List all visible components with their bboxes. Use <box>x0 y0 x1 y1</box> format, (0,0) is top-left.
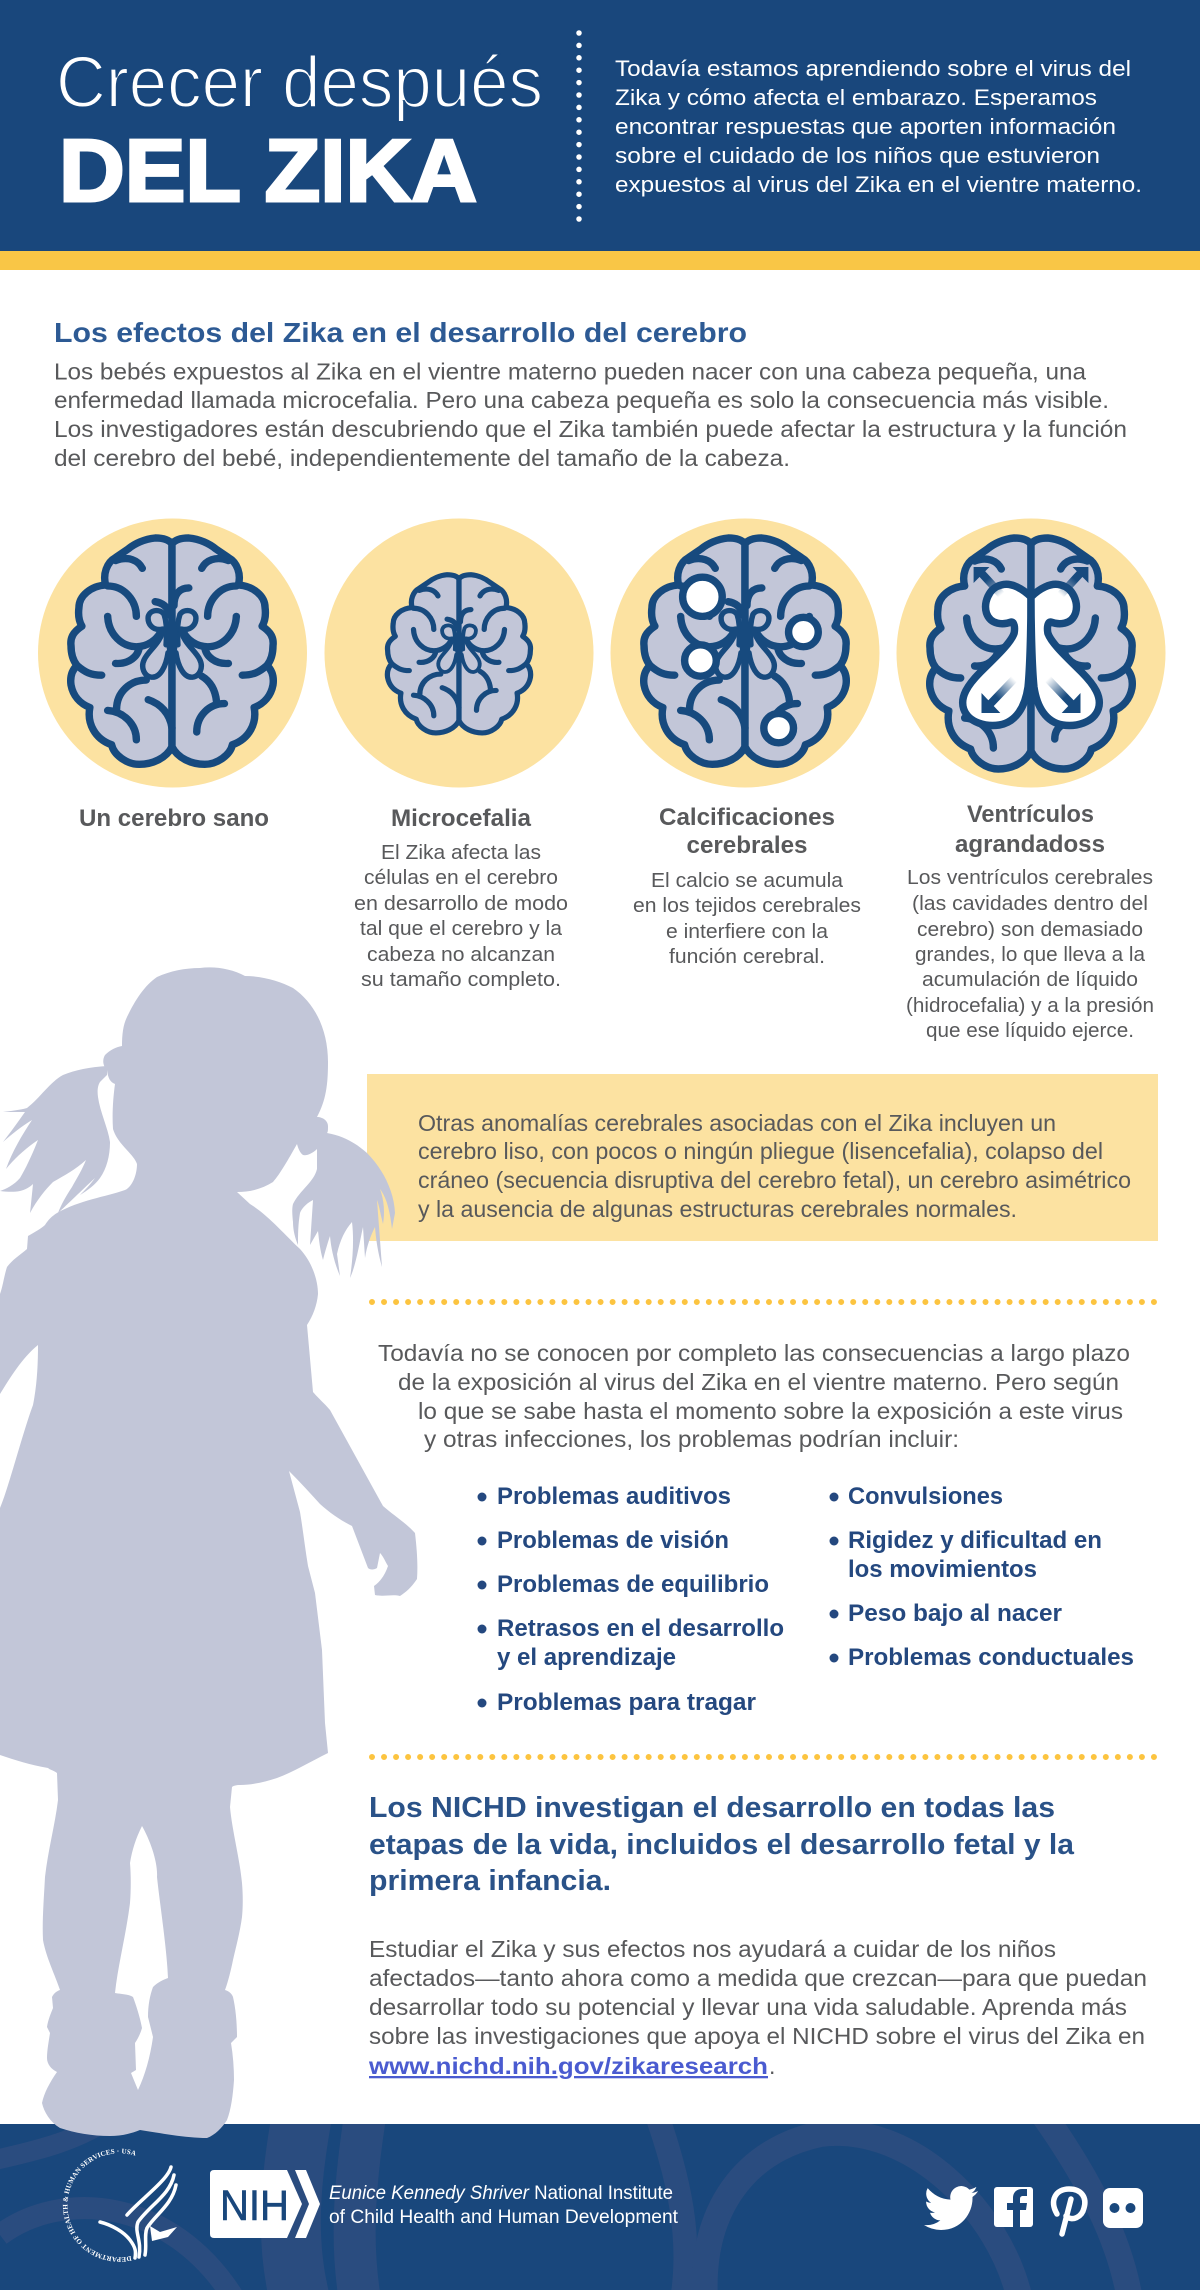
header banner <box>0 0 1200 270</box>
description: tal que el cerebro y la <box>360 918 563 940</box>
intro text: encontrar respuestas que aporten información <box>615 114 1116 139</box>
description: cerebro) son demasiado <box>917 919 1143 941</box>
icon: healthy brain <box>71 538 273 764</box>
girl silhouette <box>0 967 417 2138</box>
label: Ventrículos <box>967 801 1094 828</box>
problem list: right column: Peso bajo al nacer <box>848 1600 1062 1627</box>
icon: brain with calcifications <box>644 538 846 764</box>
icon: small brain <box>387 575 531 733</box>
description: Los ventrículos cerebrales <box>907 867 1153 889</box>
callout text <box>418 1110 1131 1222</box>
body <box>0 967 417 2138</box>
long-term consequences paragraph: Todavía no se conocen por completo las consecuencias a largo plazo <box>378 1340 1130 1366</box>
description: función cerebral. <box>669 946 825 968</box>
footer <box>0 2124 1200 2290</box>
intro paragraph <box>54 358 1127 471</box>
long-term consequences paragraph <box>378 1340 1130 1452</box>
callout text: cráneo (secuencia disruptiva del cerebro fetal), un cerebro asimétrico <box>418 1167 1131 1193</box>
icon: brain with enlarged ventricles <box>930 538 1132 769</box>
intro text: Zika y cómo afecta el embarazo. Esperamos <box>615 85 1097 110</box>
panel: enlarged ventricles <box>896 518 1166 1042</box>
intro paragraph: Los bebés expuestos al Zika en el vientre materno pueden nacer con una cabeza pequeña, una <box>54 358 1086 384</box>
logo: NIH: NIH <box>220 2182 289 2230</box>
NICHD heading: etapas de la vida, incluidos el desarrollo fetal y la <box>369 1829 1075 1861</box>
problem list: right column: Problemas conductuales <box>848 1644 1134 1671</box>
problem list: left column: Problemas para tragar <box>497 1689 756 1716</box>
label: agrandadoss <box>955 831 1105 858</box>
problem list: left column: Retrasos en el desarrollo <box>497 1615 784 1642</box>
panel: calcifications <box>610 518 880 968</box>
label: Calcificaciones <box>659 804 835 831</box>
intro text: Todavía estamos aprendiendo sobre el virus del <box>615 56 1131 81</box>
long-term consequences paragraph: lo que se sabe hasta el momento sobre la exposición a este virus <box>418 1398 1123 1424</box>
closing paragraph with link: www.nichd.nih.gov/zikaresearch <box>368 2053 768 2079</box>
description: en desarrollo de modo <box>354 893 568 915</box>
description: en los tejidos cerebrales <box>633 895 861 917</box>
title <box>56 43 543 220</box>
description: El calcio se acumula <box>651 870 844 892</box>
closing paragraph with link <box>368 1936 1147 2079</box>
icon circle <box>610 518 880 788</box>
closing paragraph with link: Estudiar el Zika y sus efectos nos ayudará a cuidar de los niños <box>369 1936 1056 1962</box>
description: (hidrocefalia) y a la presión <box>906 995 1154 1017</box>
problem list: left column: Problemas de visión <box>497 1527 729 1554</box>
panel: microcephaly <box>324 518 594 991</box>
closing paragraph with link: afectados—tanto ahora como a medida que crezcan—para que puedan <box>369 1965 1147 1991</box>
logo: NIH <box>210 2170 320 2238</box>
description: su tamaño completo. <box>361 969 561 991</box>
institute name <box>329 2183 679 2228</box>
label: Microcefalia <box>391 805 532 832</box>
label <box>659 804 835 859</box>
problem list: left column: Problemas de equilibrio <box>497 1571 769 1598</box>
icon circle <box>896 518 1166 788</box>
closing paragraph with link: . <box>769 2053 775 2079</box>
description <box>906 867 1154 1042</box>
section heading: brain effects: Los efectos del Zika en el desarrollo del cerebro <box>54 317 747 348</box>
callout text: Otras anomalías cerebrales asociadas con el Zika incluyen un <box>418 1110 1056 1136</box>
problem list: right column: Rigidez y dificultad en <box>848 1527 1102 1554</box>
icon: pinterest <box>1054 2189 1085 2234</box>
description: e interfiere con la <box>666 921 829 943</box>
description: El Zika afecta las <box>381 842 541 864</box>
description <box>633 870 861 968</box>
logo: HHS <box>62 2148 178 2262</box>
icon circle <box>324 518 594 788</box>
panel: healthy brain <box>38 518 307 832</box>
long-term consequences paragraph: de la exposición al virus del Zika en el vientre materno. Pero según <box>398 1369 1119 1395</box>
intro paragraph: Los investigadores están descubriendo que el Zika también puede afectar la estructura y la función <box>54 416 1127 442</box>
intro paragraph: del cerebro del bebé, independientemente del tamaño de la cabeza. <box>54 445 790 471</box>
long-term consequences paragraph: y otras infecciones, los problemas podrían incluir: <box>424 1426 959 1452</box>
callout box <box>367 1074 1158 1241</box>
NICHD heading: Los NICHD investigan el desarrollo en todas las <box>369 1792 1055 1824</box>
description: que ese líquido ejerce. <box>926 1020 1134 1042</box>
callout text: y la ausencia de algunas estructuras cerebrales normales. <box>418 1196 1017 1222</box>
problem list: left column: y el aprendizaje <box>497 1644 676 1671</box>
problem list: right column: los movimientos <box>848 1556 1037 1583</box>
NICHD heading: primera infancia. <box>369 1865 611 1897</box>
intro text: expuestos al virus del Zika en el vientre materno. <box>615 172 1142 197</box>
problem list: right column <box>830 1483 1134 1671</box>
description: acumulación de líquido <box>922 969 1138 991</box>
description <box>354 842 568 991</box>
description: (las cavidades dentro del <box>912 893 1148 915</box>
yellow band <box>0 251 1200 270</box>
icon: flickr <box>1103 2188 1143 2228</box>
institute name: of Child Health and Human Development <box>329 2207 679 2228</box>
callout: other anomalies <box>367 1074 1158 1241</box>
problem list: left column <box>478 1483 784 1716</box>
icon: twitter <box>924 2186 978 2230</box>
header background <box>0 0 1200 251</box>
label: Un cerebro sano <box>79 805 269 832</box>
intro paragraph: enfermedad llamada microcefalia. Pero una cabeza pequeña es solo la consecuencia más visible. <box>54 387 1109 413</box>
label <box>955 801 1105 858</box>
NICHD heading <box>369 1792 1075 1897</box>
intro text <box>615 56 1142 197</box>
description: cabeza no alcanzan <box>367 944 555 966</box>
intro text: sobre el cuidado de los niños que estuvieron <box>615 143 1100 168</box>
title: Crecer después <box>56 43 543 123</box>
description: células en el cerebro <box>364 867 558 889</box>
icon: facebook <box>994 2187 1033 2227</box>
closing paragraph with link: desarrollar todo su potencial y llevar una vida saludable. Aprenda más <box>369 1994 1127 2020</box>
callout text: cerebro liso, con pocos o ningún pliegue (lisencefalia), colapso del <box>418 1138 1103 1164</box>
icon circle <box>38 518 307 788</box>
left pigtail <box>0 1066 110 1213</box>
problem list: right column: Convulsiones <box>848 1483 1003 1510</box>
description: grandes, lo que lleva a la <box>915 944 1146 966</box>
label: cerebrales <box>686 832 808 859</box>
problem list: left column: Problemas auditivos <box>497 1483 731 1510</box>
logo: HHS: DEPARTMENT OF HEALTH & HUMAN SERVICES · USA <box>62 2148 136 2262</box>
footer background <box>0 2124 1200 2290</box>
institute name: Eunice Kennedy Shriver National Institute <box>329 2183 673 2204</box>
title: DEL ZIKA <box>59 121 477 220</box>
closing paragraph with link: sobre las investigaciones que apoya el NICHD sobre el virus del Zika en <box>369 2023 1145 2049</box>
